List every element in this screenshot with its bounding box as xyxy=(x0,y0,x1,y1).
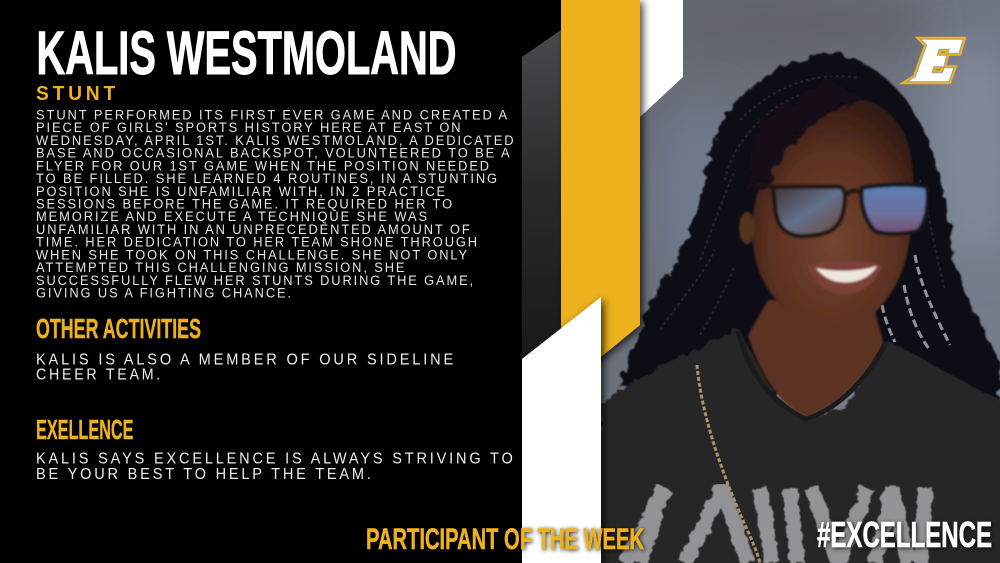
student portrait xyxy=(595,0,1000,563)
stunt description: ATTEMPTED THIS CHALLENGING MISSION, SHE xyxy=(36,260,406,275)
hair xyxy=(618,52,1000,402)
stunt description: WEDNESDAY, APRIL 1ST. KALIS WESTMOLAND, A DEDICATED xyxy=(36,133,516,148)
stunt description: UNFAMILIAR WITH IN AN UNPRECEDENTED AMOUNT OF xyxy=(36,222,472,237)
stunt description: WHEN SHE TOOK ON THIS CHALLENGE. SHE NOT ONLY xyxy=(36,248,469,262)
excellence text: KALIS SAYS EXCELLENCE IS ALWAYS STRIVING TO xyxy=(36,450,516,468)
sport label: STUNT xyxy=(36,82,119,105)
neck xyxy=(748,300,884,417)
face xyxy=(752,100,914,329)
other activities text: KALIS IS ALSO A MEMBER OF OUR SIDELINE xyxy=(36,351,456,368)
excellence text: BE YOUR BEST TO HELP THE TEAM. xyxy=(36,466,374,483)
stunt description: TIME. HER DEDICATION TO HER TEAM SHONE THROUGH xyxy=(36,235,479,250)
white top stripe xyxy=(640,0,683,117)
smile xyxy=(808,261,882,294)
excellence text xyxy=(36,450,516,483)
icon: school E logo xyxy=(907,39,963,82)
hair over forehead xyxy=(745,80,862,190)
glasses xyxy=(757,184,928,236)
stunt description: BASE AND OCCASIONAL BACKSPOT, VOLUNTEERED TO BE A xyxy=(36,146,512,160)
excellence heading: EXELLENCE xyxy=(36,414,134,445)
shirt collar xyxy=(738,330,886,419)
stunt description: STUNT PERFORMED ITS FIRST EVER GAME AND CREATED A xyxy=(36,107,509,122)
stunt description: POSITION SHE IS UNFAMILIAR WITH, IN 2 PRACTICE xyxy=(36,184,447,199)
necklace chain xyxy=(697,365,760,563)
stunt description: TO BE FILLED. SHE LEARNED 4 ROUTINES, IN A STUNTING xyxy=(36,171,499,186)
stunt description xyxy=(36,107,516,301)
shirt xyxy=(595,328,1000,563)
stunt description: FLYER FOR OUR 1ST GAME WHEN THE POSITION NEEDED xyxy=(36,158,491,173)
ear xyxy=(739,212,755,244)
stunt description: MEMORIZE AND EXECUTE A TECHNIQUE SHE WAS xyxy=(36,209,429,224)
shirt lettering xyxy=(625,488,926,563)
photo backdrop xyxy=(601,0,1000,436)
other activities text: CHEER TEAM. xyxy=(36,367,163,384)
other activities heading: OTHER ACTIVITIES xyxy=(36,313,201,344)
stunt description: GIVING US A FIGHTING CHANCE. xyxy=(36,286,293,301)
hair strand highlights xyxy=(660,76,945,335)
grey stripe xyxy=(522,30,561,372)
participant of the week label: PARTICIPANT OF THE WEEK xyxy=(366,523,644,556)
white braid highlights xyxy=(882,255,950,350)
white lower stripe xyxy=(522,297,601,563)
gold stripe xyxy=(561,0,640,385)
other activities text xyxy=(36,351,456,384)
stunt description: SESSIONS BEFORE THE GAME. IT REQUIRED HER TO xyxy=(36,196,454,212)
name heading: KALIS WESTMOLAND xyxy=(36,19,456,87)
stunt description: PIECE OF GIRLS' SPORTS HISTORY HERE AT EAST ON xyxy=(36,120,462,135)
stunt description: SUCCESSFULLY FLEW HER STUNTS DURING THE GAME, xyxy=(36,273,475,288)
